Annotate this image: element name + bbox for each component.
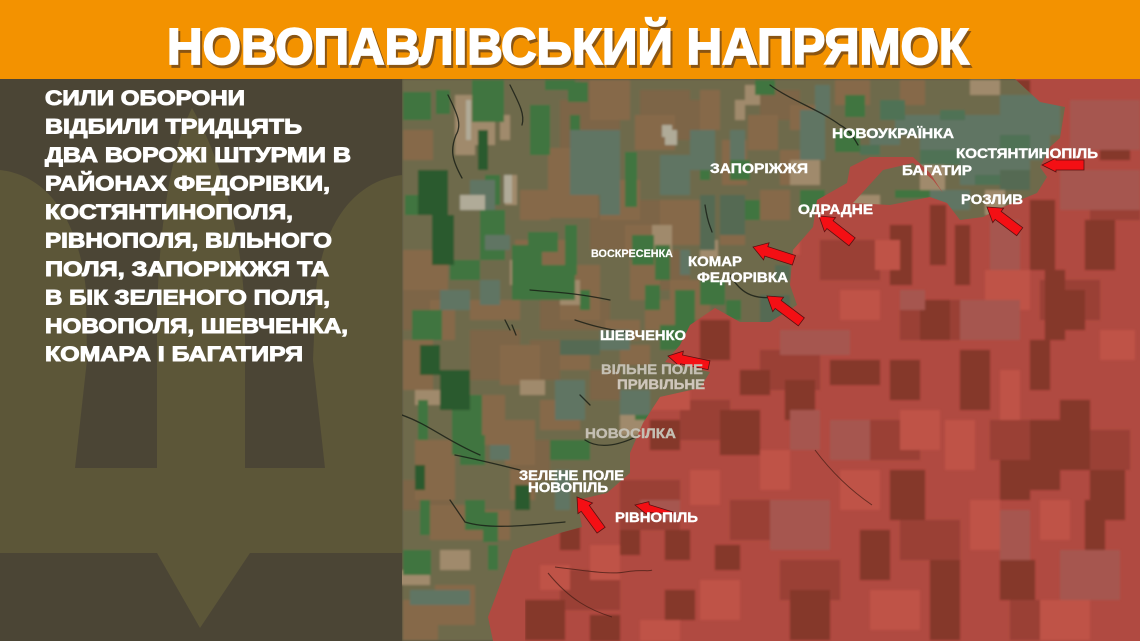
arrow: Kostiantynopil [1042, 158, 1084, 172]
label: Kostiantynopil: КОСТЯНТИНОПІЛЬ [956, 146, 1098, 161]
arrow: Novopil [576, 496, 606, 534]
arrow: Komar [752, 242, 796, 266]
text block: summary: ДВА ВОРОЖІ ШТУРМИ В [45, 144, 351, 167]
arrow: Shevchenko [667, 350, 710, 370]
text block: summary: СИЛИ ОБОРОНИ [45, 87, 245, 110]
arrow: Fedorivka [766, 296, 805, 326]
title shadow: НОВОПАВЛІВСЬКИЙ НАПРЯМОК [169, 20, 972, 78]
text block: summary [45, 87, 351, 366]
label: Rozlyv: РОЗЛИВ [961, 192, 1023, 207]
map: occupied territory overlay [488, 79, 1140, 641]
label: Komar: КОМАР [688, 254, 742, 269]
text block: summary: ПОЛЯ, ЗАПОРІЖЖЯ ТА [45, 258, 329, 281]
text block: summary: В БІК ЗЕЛЕНОГО ПОЛЯ, [45, 286, 330, 310]
text block: summary: РІВНОПОЛЯ, ВІЛЬНОГО [45, 230, 332, 252]
left panel background [0, 79, 402, 641]
text block: summary: КОМАРА І БАГАТИРЯ [45, 343, 303, 366]
label: Novoukrainka: НОВОУКРАЇНКА [832, 126, 954, 141]
emblem: trident watermark [0, 108, 402, 628]
label: Novosilka: НОВОСІЛКА [585, 426, 676, 441]
label: Bahatyr: БАГАТИР [902, 163, 972, 178]
arrow: Rozlyv [986, 206, 1024, 236]
map: farmland fields [402, 79, 1065, 641]
title bar [0, 0, 1140, 79]
label: Fedorivka: ФЕДОРІВКА [697, 270, 788, 285]
label: Shevchenko: ШЕВЧЕНКО [600, 328, 686, 343]
panel: satellite map [400, 79, 1140, 641]
label: Voskresenka: ВОСКРЕСЕНКА [591, 248, 673, 260]
text block: summary: ВІДБИЛИ ТРИДЦЯТЬ [45, 116, 302, 138]
label: Novopil: НОВОПІЛЬ [528, 480, 608, 495]
arrow: Rivnopil [634, 501, 677, 515]
map: rivers and roads [402, 85, 858, 526]
text block: summary: НОВОПОЛЯ, ШЕВЧЕНКА, [45, 315, 348, 338]
map labels [519, 126, 1098, 525]
label: Zelene Pole: ЗЕЛЕНЕ ПОЛЕ [519, 468, 624, 483]
label: Odradne: ОДРАДНЕ [798, 202, 873, 217]
label: Rivnopil: РІВНОПІЛЬ [615, 510, 698, 525]
label: Vilne Pole: ВІЛЬНЕ ПОЛЕ [601, 362, 703, 377]
text block: summary: РАЙОНАХ ФЕДОРІВКИ, [45, 172, 330, 196]
map: trench lines [548, 450, 872, 617]
label: Pryvilne: ПРИВІЛЬНЕ [617, 377, 705, 392]
label: Zaporizhzhia: ЗАПОРІЖЖЯ [710, 161, 808, 176]
text block: summary: КОСТЯНТИНОПОЛЯ, [45, 201, 293, 224]
title: НОВОПАВЛІВСЬКИЙ НАПРЯМОК [167, 17, 970, 75]
arrow: Odradne [819, 216, 856, 246]
